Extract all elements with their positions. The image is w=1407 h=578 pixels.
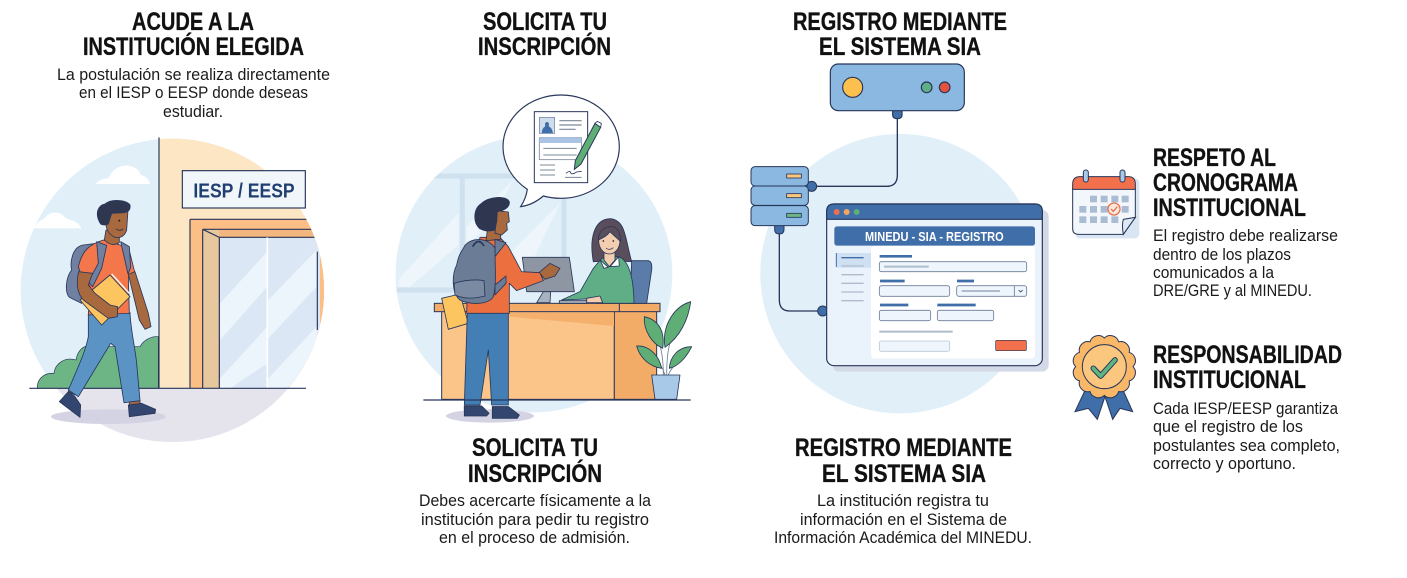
heading: responsabilidad institucional: INSTITUCIONAL — [1153, 366, 1306, 394]
text block: registro en el SIA — [774, 491, 1032, 547]
text block: garantía: correcto y oportuno. — [1153, 454, 1296, 473]
receptionist — [562, 219, 652, 303]
heading: respeto al cronograma institucional: RESPETO AL — [1153, 144, 1276, 172]
text block: registro en el SIA: Información Académica del MINEDU. — [774, 528, 1032, 547]
illustration: SIA system — [751, 64, 1049, 413]
heading: acude a la institución elegida: INSTITUCIÓN ELEGIDA — [83, 31, 304, 61]
heading: respeto al cronograma institucional: CRONOGRAMA — [1153, 169, 1298, 197]
text block: acercarte físicamente: institución para pedir tu registro — [421, 510, 649, 529]
heading: acude a la institución elegida: ACUDE A LA — [132, 8, 254, 36]
text block: acercarte físicamente: en el proceso de admisión. — [439, 528, 630, 547]
text block: plazos: comunicados a la — [1153, 263, 1274, 282]
text block: acercarte físicamente — [419, 491, 652, 547]
heading: solicita tu inscripción (top): INSCRIPCIÓN — [478, 31, 611, 61]
desk — [434, 303, 660, 399]
heading: respeto al cronograma institucional: INSTITUCIONAL — [1153, 194, 1306, 222]
text block: garantía: postulantes sea completo, — [1153, 436, 1340, 455]
heading: solicita tu inscripción (bottom) — [468, 434, 602, 488]
browser window: MINEDU SIA registro: MINEDU - SIA - REGISTRO — [865, 229, 1004, 244]
heading: acude a la institución elegida — [83, 8, 304, 61]
text block: plazos: El registro debe realizarse — [1153, 226, 1338, 245]
text block: garantía — [1153, 399, 1340, 473]
text block: garantía: que el registro de los — [1153, 417, 1303, 436]
text block: plazos: DRE/GRE y al MINEDU. — [1153, 281, 1312, 300]
heading: registro mediante el sistema SIA (bottom) — [795, 434, 1012, 488]
heading: registro mediante el sistema SIA (top): EL SISTEMA SIA — [819, 33, 981, 61]
sign: IESP / EESP: IESP / EESP — [193, 179, 295, 202]
illustration: student at reception desk — [390, 95, 692, 423]
computer monitor — [522, 257, 587, 303]
speech bubble — [503, 95, 619, 207]
clouds — [96, 165, 150, 184]
text block: postulación — [57, 65, 330, 121]
plant — [637, 302, 692, 399]
heading: responsabilidad institucional — [1153, 341, 1342, 394]
bushes — [37, 337, 158, 388]
heading: respeto al cronograma institucional — [1153, 144, 1306, 222]
text block: plazos: dentro de los plazos — [1153, 245, 1291, 264]
text block: plazos — [1153, 226, 1338, 300]
student from behind — [442, 197, 560, 418]
icon: calendar — [1073, 170, 1139, 238]
heading: solicita tu inscripción (bottom): INSCRIPCIÓN — [468, 458, 602, 488]
text block: garantía: Cada IESP/EESP garantiza — [1153, 399, 1338, 418]
icon: form and pen — [534, 112, 601, 183]
icon: rosette badge — [1073, 336, 1135, 419]
illustration: student walking to institution — [20, 137, 324, 442]
heading: responsabilidad institucional: RESPONSABILIDAD — [1153, 341, 1342, 369]
text block: postulación: La postulación se realiza directamente — [57, 65, 330, 84]
device: top server unit — [830, 64, 964, 119]
heading: registro mediante el sistema SIA (bottom): REGISTRO MEDIANTE — [795, 434, 1012, 462]
text block: registro en el SIA: información en el Sistema de — [800, 510, 1007, 529]
sign: IESP / EESP — [182, 171, 305, 208]
browser window: MINEDU SIA registro — [818, 204, 1049, 372]
heading: solicita tu inscripción (top) — [478, 8, 611, 61]
text block: postulación: estudiar. — [163, 102, 223, 121]
heading: solicita tu inscripción (bottom): SOLICITA TU — [472, 434, 598, 462]
student — [59, 200, 156, 417]
text block: acercarte físicamente: Debes acercarte físicamente a la — [419, 491, 652, 510]
heading: registro mediante el sistema SIA (top): REGISTRO MEDIANTE — [793, 8, 1007, 36]
heading: solicita tu inscripción (top): SOLICITA TU — [483, 8, 607, 36]
device: server stack — [751, 167, 817, 234]
text block: postulación: en el IESP o EESP donde deseas — [79, 83, 308, 102]
heading: registro mediante el sistema SIA (top) — [793, 8, 1007, 61]
heading: registro mediante el sistema SIA (bottom): EL SISTEMA SIA — [822, 460, 986, 488]
text block: registro en el SIA: La institución registra tu — [817, 491, 989, 510]
